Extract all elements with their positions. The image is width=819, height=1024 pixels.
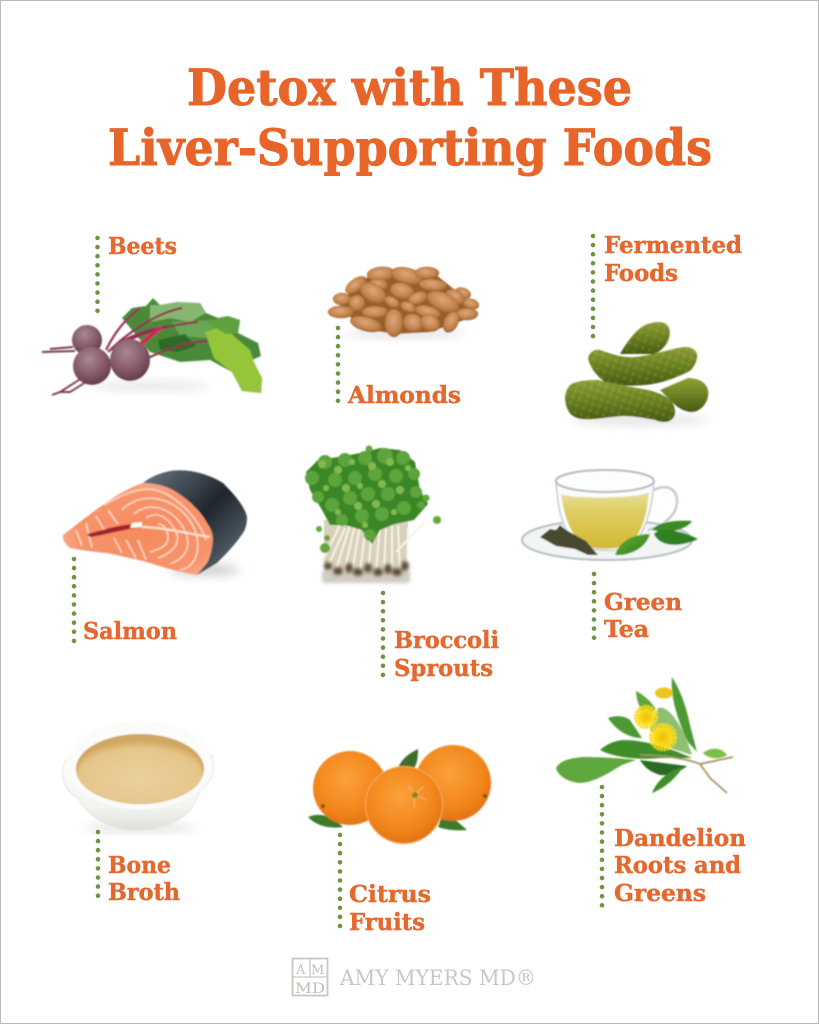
panel: fermented foods bbox=[565, 231, 742, 425]
logo wordmark: AMY MYERS MD® bbox=[339, 966, 536, 990]
panel: salmon bbox=[63, 470, 247, 645]
dotted leader: fermented foods bbox=[591, 236, 595, 340]
title: Liver-Supporting Foods bbox=[108, 118, 712, 177]
dotted leader: broccoli sprouts bbox=[381, 593, 385, 679]
label: Fermented Foods: Fermented bbox=[604, 231, 742, 259]
label: Broccoli Sprouts: Sprouts bbox=[394, 654, 493, 682]
icon: glass tea cup and saucer bbox=[522, 470, 698, 560]
icon: bowl of broth bbox=[63, 721, 214, 831]
label: Green Tea: Green bbox=[604, 588, 682, 616]
icon: beets bbox=[42, 298, 262, 395]
label: Dandelion Roots and Greens: Greens bbox=[614, 879, 706, 907]
label: Bone Broth bbox=[108, 851, 180, 906]
label: Dandelion Roots and Greens bbox=[614, 824, 746, 907]
dotted leader: dandelion bbox=[600, 787, 604, 907]
panel: citrus fruits bbox=[308, 745, 491, 936]
icon: oranges bbox=[308, 745, 491, 844]
dotted leader: beets bbox=[95, 238, 100, 314]
label: Green Tea: Tea bbox=[604, 615, 649, 643]
logo: Amy Myers MD bbox=[292, 958, 536, 997]
panel: beets bbox=[42, 232, 262, 395]
dotted leader: citrus fruits bbox=[338, 835, 342, 933]
label: Dandelion Roots and Greens: Dandelion bbox=[614, 824, 746, 852]
dotted leader: salmon bbox=[72, 559, 76, 642]
label: Bone Broth: Broth bbox=[108, 878, 180, 906]
title bbox=[108, 58, 712, 177]
panel: almonds bbox=[328, 264, 480, 409]
label: Almonds: Almonds bbox=[347, 381, 461, 409]
label: Bone Broth: Bone bbox=[108, 851, 171, 879]
label: Salmon: Salmon bbox=[83, 617, 177, 645]
logo mark: A bbox=[295, 963, 306, 978]
label: Broccoli Sprouts bbox=[394, 626, 499, 682]
panel: dandelion bbox=[556, 677, 746, 907]
logo mark bbox=[292, 958, 328, 997]
panel: green tea bbox=[522, 470, 698, 643]
label: Dandelion Roots and Greens: Roots and bbox=[614, 851, 741, 879]
dotted leader: almonds bbox=[336, 328, 340, 405]
dotted leader: bone broth bbox=[96, 832, 100, 904]
label: Green Tea bbox=[604, 588, 682, 643]
label: Fermented Foods bbox=[604, 231, 742, 287]
icon: dandelion plant bbox=[556, 677, 733, 793]
logo mark: M bbox=[311, 963, 324, 978]
label: Citrus Fruits: Fruits bbox=[349, 908, 425, 936]
icon: pickles bbox=[565, 322, 710, 425]
label: Broccoli Sprouts: Broccoli bbox=[394, 626, 499, 654]
label: Citrus Fruits: Citrus bbox=[349, 880, 431, 908]
dotted leader: green tea bbox=[592, 574, 596, 642]
logo mark: MD bbox=[295, 981, 325, 997]
title: Detox with These bbox=[187, 58, 632, 117]
label: Fermented Foods: Foods bbox=[604, 259, 678, 287]
icon: almonds bbox=[328, 264, 480, 337]
label: Citrus Fruits bbox=[349, 880, 431, 936]
label: Beets: Beets bbox=[108, 232, 177, 260]
panel: broccoli sprouts bbox=[305, 446, 499, 682]
panel: bone broth bbox=[63, 721, 214, 906]
icon: broccoli sprouts bbox=[305, 446, 441, 583]
icon: salmon steak bbox=[63, 470, 247, 575]
